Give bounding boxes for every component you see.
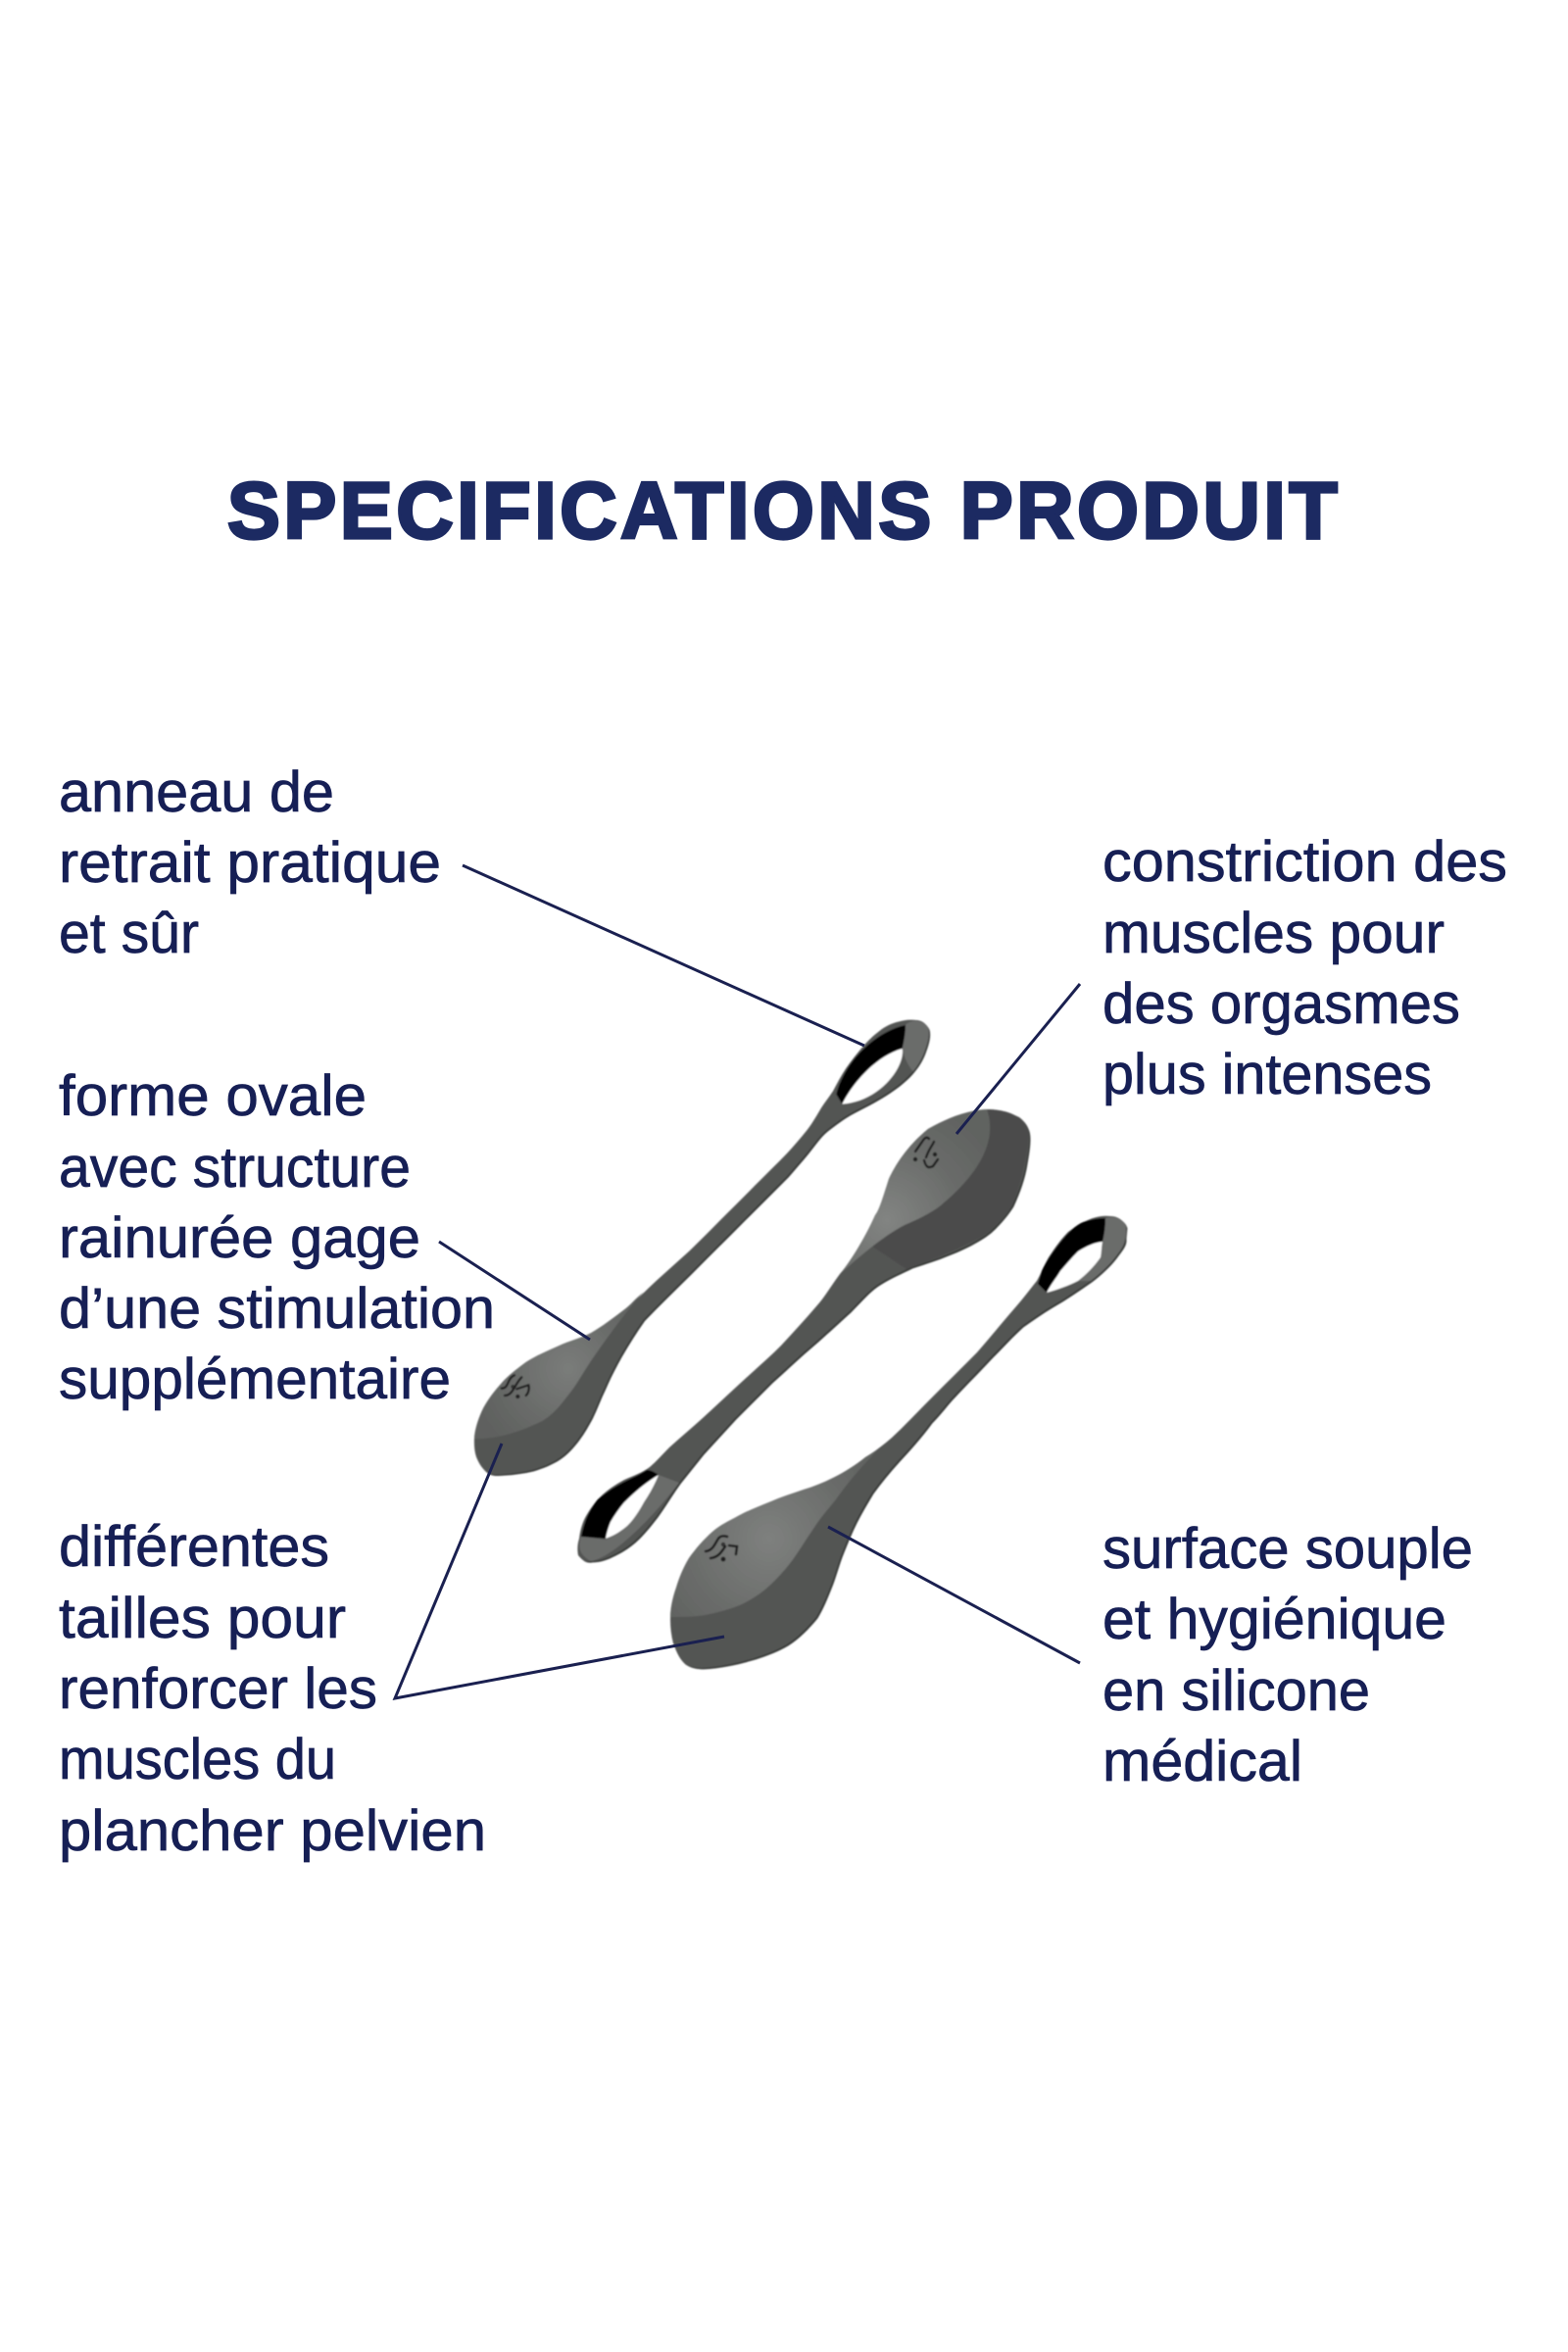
label: constriction des muscles: muscles pour [1102,902,1445,965]
label: forme ovale: avec structure [59,1136,411,1200]
label: différentes tailles: tailles pour [59,1587,346,1650]
label: différentes tailles: renforcer les [59,1657,377,1721]
label: anneau de retrait: retrait pratique [59,831,441,895]
label: constriction des muscles: plus intenses [1102,1043,1432,1106]
label: forme ovale: d’une stimulation [59,1277,495,1341]
label: forme ovale: forme ovale [59,1064,367,1128]
label: surface souple: surface souple [1102,1517,1473,1581]
label: forme ovale: supplémentaire [59,1348,451,1411]
label: anneau de retrait: anneau de [59,760,334,824]
title: SPECIFICATIONS PRODUIT [227,466,1338,556]
line: différentes tailles, forked [395,1444,724,1698]
label: différentes tailles: différentes [59,1515,329,1579]
leader lines [395,865,1080,1698]
label: surface souple [1102,1517,1473,1793]
line: constriction [956,984,1080,1134]
label: surface souple: en silicone [1102,1659,1370,1723]
line: surface souple [828,1527,1080,1663]
line: forme ovale [439,1242,590,1340]
label: forme ovale: rainurée gage [59,1206,420,1270]
label: constriction des muscles [1102,830,1507,1106]
product illustration: three kegel weights [474,1020,1127,1669]
label: différentes tailles: muscles du [59,1728,336,1791]
label: constriction des muscles: des orgasmes [1102,972,1460,1036]
medium weight [577,1109,1030,1563]
small weight [474,1020,930,1476]
label: différentes tailles: plancher pelvien [59,1799,486,1863]
label: anneau de retrait [59,760,441,965]
label: surface souple: médical [1102,1730,1302,1793]
label: constriction des muscles: constriction des [1102,830,1507,894]
large weight [670,1216,1127,1669]
label: différentes tailles [59,1515,486,1863]
label: anneau de retrait: et sûr [59,902,199,965]
label: surface souple: et hygiénique [1102,1588,1446,1651]
label: forme ovale [59,1064,495,1411]
line: anneau de retrait [463,865,864,1046]
